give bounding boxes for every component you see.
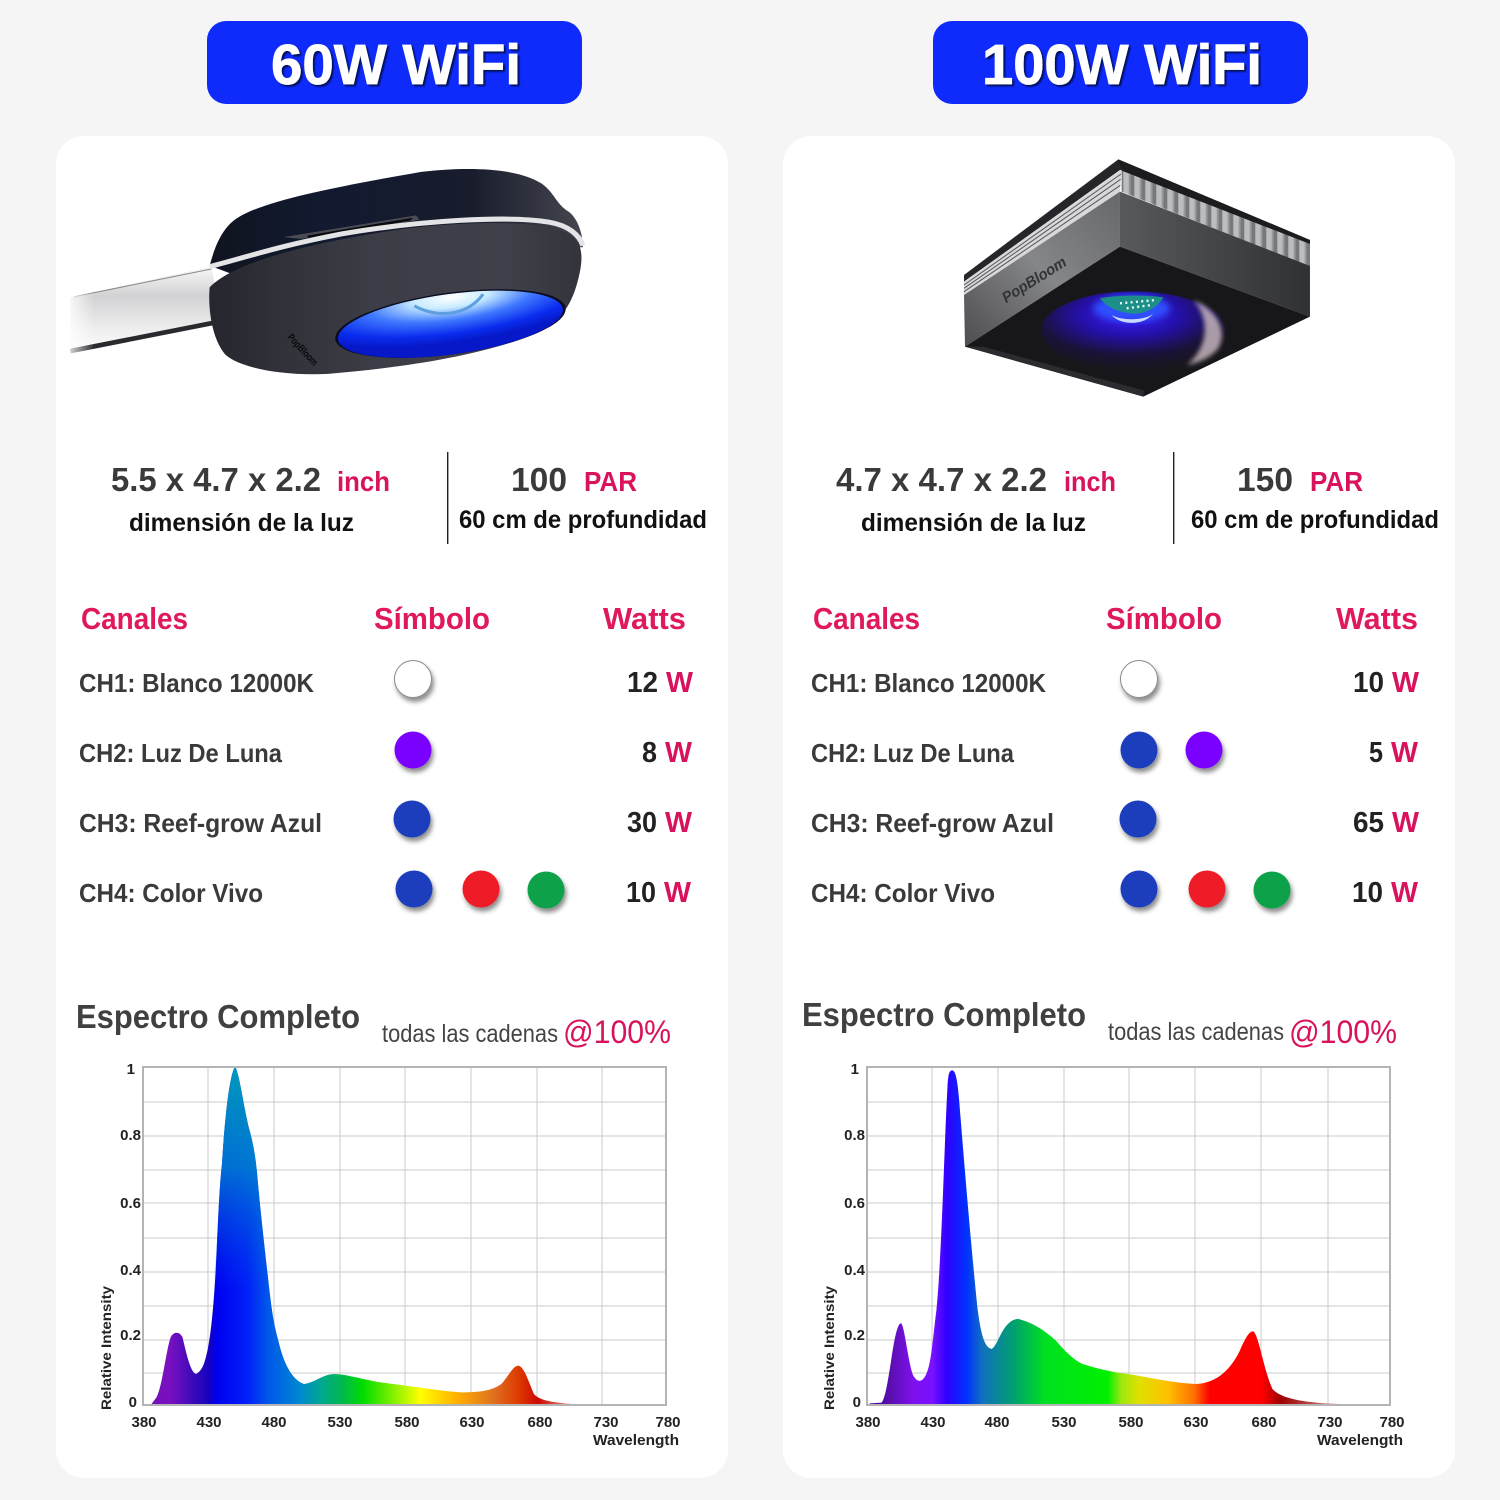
x axis labels: 580 [1118,1414,1144,1431]
panel: 100W WiFi [783,136,1455,1478]
PAR block: 60 cm de profundidad [459,506,707,534]
channel watts: 8 [642,737,657,769]
PAR block [459,461,707,534]
heading: 100W WiFi: 100W WiFi [982,33,1262,97]
channel watts: 10 [1353,667,1384,699]
y axis labels: 0.4 [120,1262,142,1279]
channel watts: W [665,807,693,839]
channel watts [1352,667,1420,909]
channel table [79,601,694,909]
dimensions block: inch [1064,466,1116,497]
y axis title: Relative Intensity [98,1286,114,1410]
spectrum heading [76,998,671,1050]
channel names: CH1: Blanco 12000K [79,668,314,698]
channel watts: W [665,737,693,769]
chart frame [143,1067,666,1405]
channel names: CH4: Color Vivo [79,878,263,908]
spectrum heading: todas las cadenas [382,1020,558,1048]
divider [447,452,448,544]
chart grid [143,1067,666,1405]
table headers: Símbolo [374,601,490,636]
chart grid [867,1067,1390,1405]
panel: 60W WiFi [56,136,728,1478]
spectrum heading [802,996,1397,1050]
channel watts: 10 [626,877,656,909]
product image: 60W lamp: PopBloom [285,332,320,368]
x axis labels: 780 [1379,1414,1405,1431]
heading: 60W WiFi: 60W WiFi [271,33,521,97]
dimensions block [836,461,1116,537]
channel names: CH3: Reef-grow Azul [811,808,1054,838]
x axis labels: 480 [984,1414,1010,1431]
dimensions block: 5.5 x 4.7 x 2.2 [111,461,321,498]
channel names: CH2: Luz De Luna [79,738,282,768]
y axis labels: 1 [127,1061,135,1078]
PAR block: PAR [584,466,637,497]
x axis labels [131,1414,681,1431]
channel names: CH4: Color Vivo [811,878,995,908]
x axis labels: 680 [1251,1414,1277,1431]
x axis labels: 480 [261,1414,287,1431]
channel table [811,601,1420,909]
x axis labels: 730 [1317,1414,1343,1431]
product image: 100W lamp: PopBloom [999,254,1070,307]
dimensions block: dimensión de la luz [129,509,354,537]
product image: 100W lamp [964,159,1310,397]
spectrum chart [98,1061,681,1449]
y axis labels [120,1061,142,1411]
channel watts: 10 [1352,877,1383,909]
x axis title: Wavelength [1317,1432,1403,1449]
channel watts [626,667,694,909]
y axis labels [844,1061,866,1411]
x axis labels: 530 [1051,1414,1077,1431]
y axis labels: 0.8 [120,1127,141,1144]
heading: 60W WiFi [207,21,582,104]
spectrum heading: @100% [563,1014,671,1050]
table headers: Watts [603,601,686,636]
x axis labels: 730 [593,1414,619,1431]
PAR block: 100 [511,461,567,498]
x axis labels: 530 [327,1414,353,1431]
x axis labels: 630 [1183,1414,1209,1431]
channel names: CH2: Luz De Luna [811,738,1014,768]
PAR block: 150 [1237,461,1293,498]
PAR block: 60 cm de profundidad [1191,506,1439,534]
spectrum heading: Espectro Completo [76,998,360,1035]
spectrum heading: @100% [1289,1014,1397,1050]
dimensions block: 4.7 x 4.7 x 2.2 [836,461,1047,498]
channel watts: W [1392,667,1420,699]
channel names: CH3: Reef-grow Azul [79,808,322,838]
channel watts: 30 [627,807,657,839]
spectrum heading: Espectro Completo [802,996,1086,1033]
channel watts: W [1392,807,1420,839]
dimensions block: inch [337,466,390,497]
y axis labels: 0.2 [844,1327,865,1344]
y axis labels: 0.8 [844,1127,865,1144]
chart frame [867,1067,1390,1405]
channel watts: 65 [1353,807,1384,839]
y axis title: Relative Intensity [821,1286,837,1410]
spectrum curve [868,1070,1390,1405]
PAR block: PAR [1310,466,1363,497]
channel names [79,668,322,908]
channel watts: W [664,877,692,909]
table headers: Canales [813,601,920,636]
x axis title: Wavelength [593,1432,679,1449]
spectrum curve [151,1066,666,1405]
channel names [811,668,1054,908]
channel symbols [394,660,564,908]
channel symbols [1120,660,1290,908]
y axis labels: 0.4 [844,1262,866,1279]
dimensions block [111,461,390,537]
spectrum heading: todas las cadenas [1108,1018,1284,1046]
product image: 60W lamp [63,169,583,374]
channel watts: 12 [627,667,658,699]
x axis labels [855,1414,1405,1431]
table headers: Símbolo [1106,601,1222,636]
table headers [813,601,1418,636]
spectrum chart [821,1061,1405,1449]
x axis labels: 680 [527,1414,553,1431]
y axis labels: 0.6 [120,1195,141,1212]
channel watts: W [1391,877,1419,909]
x axis labels: 580 [394,1414,420,1431]
channel names: CH1: Blanco 12000K [811,668,1046,698]
table headers [81,601,686,636]
x axis labels: 380 [131,1414,157,1431]
y axis labels: 0.2 [120,1327,141,1344]
heading: 100W WiFi [933,21,1308,104]
x axis labels: 380 [855,1414,881,1431]
x axis labels: 430 [920,1414,946,1431]
channel watts: W [1391,737,1419,769]
y axis labels: 0 [129,1394,137,1411]
dimensions block: dimensión de la luz [861,509,1086,537]
x axis labels: 630 [459,1414,485,1431]
y axis labels: 1 [851,1061,859,1078]
channel watts: W [666,667,694,699]
x axis labels: 430 [196,1414,222,1431]
y axis labels: 0.6 [844,1195,865,1212]
table headers: Watts [1336,601,1418,636]
table headers: Canales [81,601,188,636]
y axis labels: 0 [853,1394,861,1411]
divider [1173,452,1174,544]
channel watts: 5 [1369,737,1383,769]
x axis labels: 780 [655,1414,681,1431]
PAR block [1191,461,1439,534]
